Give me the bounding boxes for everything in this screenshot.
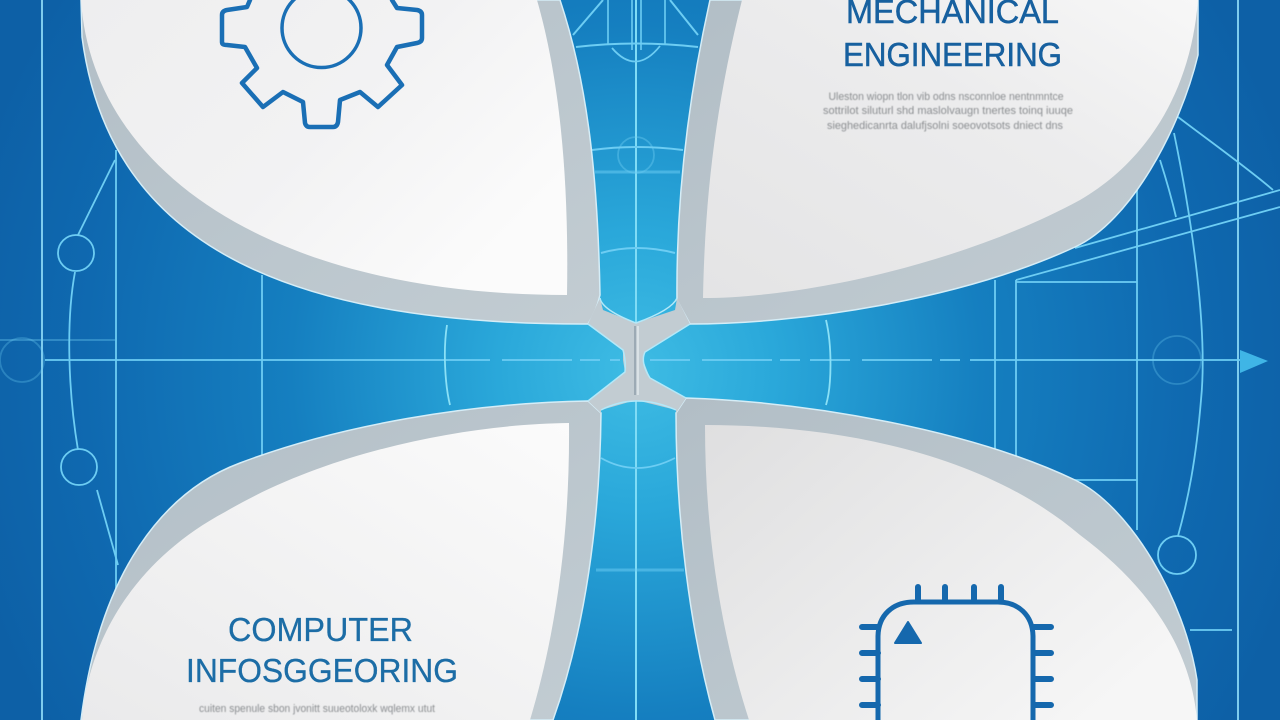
body text: mechanical engineering: sieghedicanrta dalufjsolni soeovotsots dniect dns [827, 120, 1063, 132]
panel: bottom-right petal [676, 398, 1197, 720]
top-right petal edge [677, 0, 1198, 324]
heading: mechanical engineering [843, 0, 1062, 73]
heading: computer infosggeoring: INFOSGGEORING [186, 652, 458, 689]
bottom-right petal edge [676, 398, 1197, 720]
body text: mechanical engineering [823, 91, 1073, 132]
body text: computer infosggeoring: cuiten spenule sbon jvonitt suueotoloxk wqlemx utut [199, 703, 435, 715]
icon: chip triangle marker [895, 622, 921, 643]
center connector [588, 298, 690, 413]
heading: computer infosggeoring: COMPUTER [228, 611, 413, 648]
panel: bottom-left petal [81, 401, 601, 720]
top-left petal edge [81, 0, 600, 324]
top-left petal face [81, 0, 567, 295]
bottom-left petal edge [81, 401, 601, 720]
panel: top-right petal [677, 0, 1198, 324]
heading: computer infosggeoring [186, 611, 458, 689]
top-right petal face [703, 0, 1198, 298]
bottom-right petal face [705, 425, 1197, 720]
icon: gear [222, 0, 422, 127]
body text: mechanical engineering: sottrilot siluturl shd maslolvaugn tnertes toinq iuuqe [823, 105, 1073, 117]
icon: microchip [862, 587, 1051, 720]
bottom-left petal face [82, 423, 569, 720]
heading: mechanical engineering: ENGINEERING [843, 36, 1062, 73]
panel: top-left petal [81, 0, 600, 324]
body text: mechanical engineering: Uleston wiopn tlon vib odns nsconnloe nentnmntce [828, 91, 1064, 103]
